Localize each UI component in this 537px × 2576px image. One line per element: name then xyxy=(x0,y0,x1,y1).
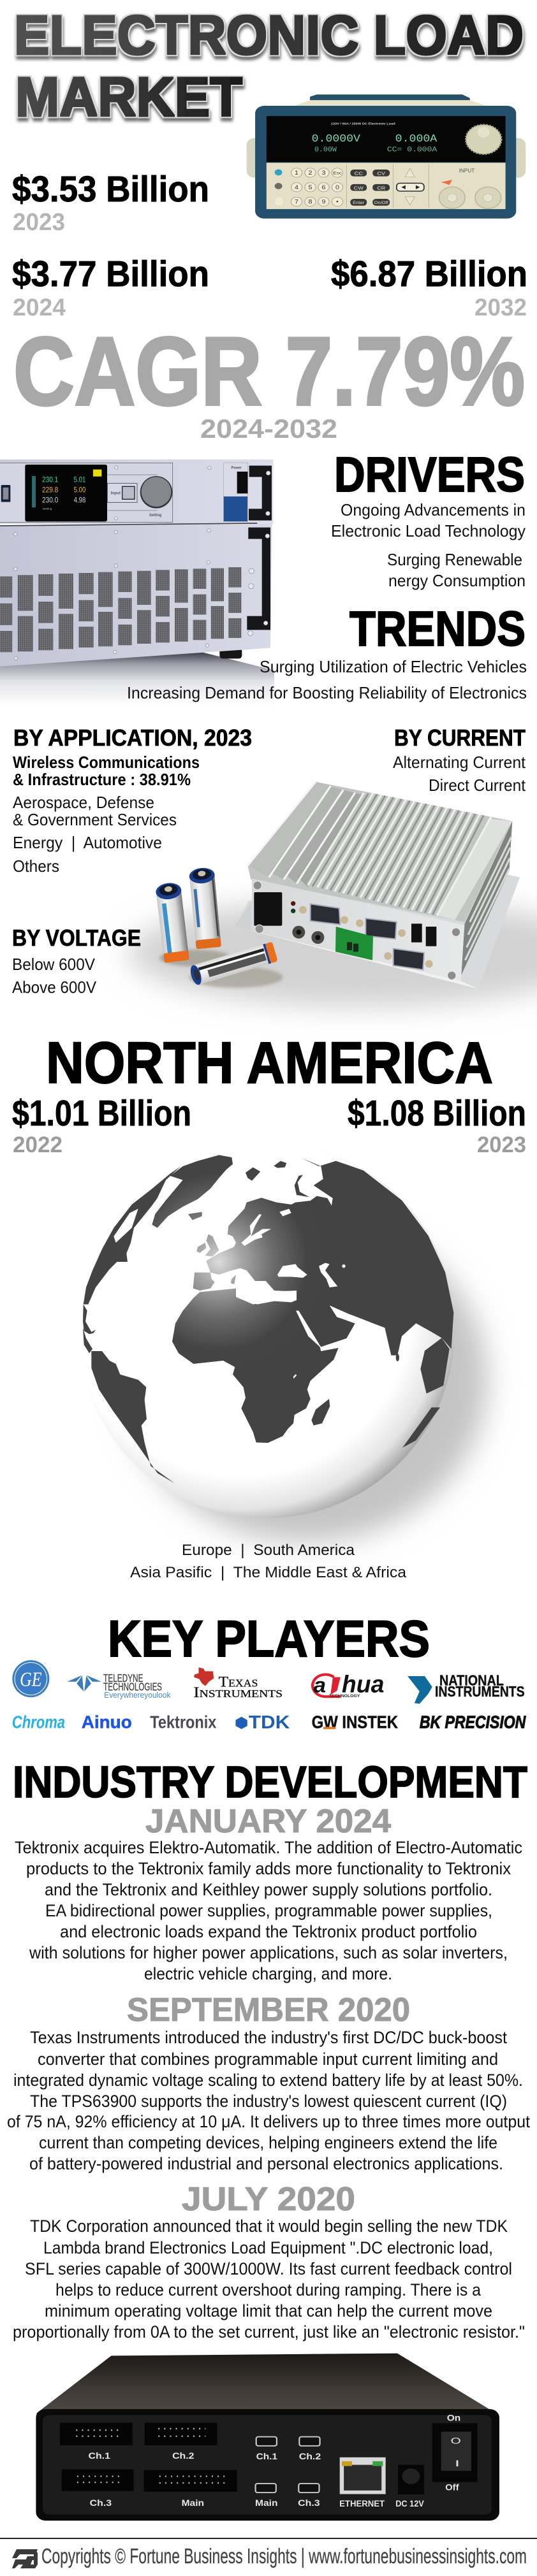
stat: 2023 market size xyxy=(12,169,209,236)
panel: by application: & Infrastructure : 38.91% xyxy=(13,770,191,789)
panel: trends xyxy=(127,602,527,702)
logo: Teledyne: Everywhereyoulook xyxy=(104,1691,171,1700)
image: black controller box rear panel: O xyxy=(451,2436,461,2446)
logo: Teledyne: TELEDYNE xyxy=(103,1672,143,1684)
image: rack power equipment: 230.0 xyxy=(42,495,59,504)
image: black controller box rear panel: Ch.1 xyxy=(256,2452,277,2462)
value: $3.53 Billion xyxy=(12,169,209,210)
description xyxy=(13,2217,525,2341)
description xyxy=(7,2028,530,2173)
image: rack power equipment: Setting xyxy=(149,514,162,517)
image: rack power equipment: Power xyxy=(232,467,242,470)
other regions xyxy=(130,1542,407,1581)
globe xyxy=(78,1142,455,1518)
floor shadow behind products xyxy=(128,899,537,1007)
image: DC electronic load device: CW xyxy=(354,185,364,191)
image: DC electronic load device: • xyxy=(336,199,339,205)
description: converter that combines programmable input current limiting and xyxy=(38,2050,498,2069)
image: DC electronic load device: 0.00W xyxy=(314,145,337,154)
battery 2 xyxy=(189,867,221,949)
panel: drivers xyxy=(331,447,526,590)
logo: Dahua: a xyxy=(313,1674,326,1697)
description: Lambda brand Electronics Load Equipment ".DC electronic load, xyxy=(43,2238,493,2257)
image: batteries xyxy=(155,867,283,988)
logo: National Instruments: NATIONAL xyxy=(439,1672,504,1689)
image: finned aluminium electronic load module xyxy=(235,782,520,989)
year: 2023 xyxy=(13,209,65,236)
segment 2: Direct Current xyxy=(429,776,526,795)
image: DC electronic load device: INPUT xyxy=(459,168,475,173)
logo: Dahua xyxy=(313,1671,385,1698)
trend 2: Increasing Demand for Boosting Reliability of Electronics xyxy=(127,683,527,702)
image: black controller box rear panel: Ch.3 xyxy=(90,2499,112,2508)
image: black controller box rear panel: I xyxy=(455,2459,459,2469)
description: EA bidirectional power supplies, programmable power supplies, xyxy=(45,1901,492,1920)
footer rule xyxy=(0,2538,537,2539)
image: rack power equipment: 5.00 xyxy=(74,485,86,494)
image: DC electronic load device: CR xyxy=(377,185,385,191)
battery 1 xyxy=(155,881,189,963)
description: products to the Tektronix family adds more functionality to Tektronix xyxy=(26,1859,511,1878)
image: black controller box rear panel: Main xyxy=(182,2499,204,2508)
panel: North America xyxy=(12,1031,526,1157)
description: helps to reduce current overshoot during ramping. There is a xyxy=(55,2280,482,2299)
driver 2: Surging Renewable xyxy=(387,550,522,569)
description xyxy=(15,1838,522,1983)
battery 3 xyxy=(189,942,278,986)
title xyxy=(14,4,524,128)
description: The TPS63900 supports the industry's lowest quiescent current (IQ) xyxy=(30,2092,507,2111)
panel: by application: Others xyxy=(13,857,59,876)
development: January 2024 xyxy=(15,1803,522,1983)
image: black controller box rear panel: Ch.2 xyxy=(299,2452,321,2462)
description: of battery-powered industrial and personal electronics applications. xyxy=(29,2154,503,2173)
logo: GW Instek: GW INSTEK xyxy=(312,1712,398,1732)
image: DC electronic load device: 6 xyxy=(321,185,326,191)
image: black controller box rear panel: Ch.1 xyxy=(89,2452,110,2461)
globe shadow xyxy=(124,1217,488,1542)
image: DC electronic load device: 0 xyxy=(335,185,339,191)
image: DC electronic load device: Enter xyxy=(353,201,365,205)
regions line 1: Europe | South America xyxy=(182,1542,355,1559)
panel: by current xyxy=(393,725,526,795)
description: minimum operating voltage limit that can help the current move xyxy=(45,2301,492,2320)
heading: BY VOLTAGE xyxy=(12,925,141,951)
image: DC electronic load device: 0.000A xyxy=(395,132,438,145)
image: DC electronic load device: 8 xyxy=(309,199,313,205)
image: DC electronic load device: 9 xyxy=(321,199,326,205)
logo: GE: GE xyxy=(20,1668,42,1691)
image: DC electronic load device: 2 xyxy=(309,170,313,177)
value: $6.87 Billion xyxy=(331,254,527,294)
image: black controller box rear panel: DC 12V xyxy=(395,2500,424,2509)
key players heading: KEY PLAYERS xyxy=(108,1610,430,1668)
description: SFL series capable of 300W/1000W. Its fast current feedback control xyxy=(25,2259,512,2278)
image: rack power equipment: 229.8 xyxy=(42,485,59,494)
year: 2032 xyxy=(474,294,527,321)
image: DC electronic load device: Esc xyxy=(333,170,342,175)
title line 2: MARKET xyxy=(15,66,242,128)
2023 label: 2023 xyxy=(477,1132,526,1157)
image: black controller box rear panel: Off xyxy=(445,2483,459,2493)
description: and electronic loads expand the Tektronix product portfolio xyxy=(60,1922,477,1941)
image: black controller box rear panel: ETHERNET xyxy=(339,2500,385,2509)
panel: drivers: nergy Consumption xyxy=(388,571,526,590)
image: DC electronic load device: 1 xyxy=(295,170,298,177)
date: SEPTEMBER 2020 xyxy=(127,1992,410,2029)
panel: by voltage xyxy=(12,925,141,997)
image: DC electronic load device xyxy=(247,94,526,219)
description: TDK Corporation announced that it would begin selling the new TDK xyxy=(30,2217,508,2236)
key player logos xyxy=(12,1660,526,1733)
trend 1: Surging Utilization of Electric Vehicles xyxy=(260,657,527,676)
CAGR period: 2024-2032 xyxy=(200,414,337,444)
image: DC electronic load device: On/Off xyxy=(374,201,388,205)
logo: Dahua: hua xyxy=(342,1671,385,1698)
segments: Aerospace, Defense xyxy=(13,793,154,812)
logo: GE xyxy=(12,1660,49,1697)
image: rack power equipment: 5.01 xyxy=(74,475,86,484)
image: black controller box rear panel: On xyxy=(447,2413,460,2423)
description: Texas Instruments introduced the industry's first DC/DC buck-boost xyxy=(30,2028,507,2047)
date: JULY 2020 xyxy=(182,2181,355,2218)
logo: Chroma: Chroma xyxy=(12,1712,65,1732)
logo: Texas Instruments: Texas xyxy=(219,1674,258,1690)
image: DC electronic load device: CC= 0.000A xyxy=(387,145,438,154)
heading: NORTH AMERICA xyxy=(46,1031,493,1096)
title line 1: ELECTRONIC LOAD xyxy=(14,4,524,66)
logo: Teledyne: TECHNOLOGIES xyxy=(103,1681,162,1693)
logo: Tektronix: Tektronix xyxy=(150,1712,217,1732)
stat: 2024 market size xyxy=(12,254,209,321)
logo: Ainuo: Ainuo xyxy=(82,1712,132,1732)
image: DC electronic load device: 3 xyxy=(321,170,326,177)
description: with solutions for higher power applications, such as solar inverters, xyxy=(29,1943,508,1962)
segment 1: Alternating Current xyxy=(393,753,526,772)
image: rack power equipment: Input xyxy=(111,491,121,496)
development: July 2020 xyxy=(13,2181,525,2341)
description: electric vehicle charging, and more. xyxy=(144,1964,392,1983)
panel: drivers: Electronic Load Technology xyxy=(331,521,526,540)
logo: Teledyne xyxy=(67,1672,171,1700)
image: DC electronic load device: 120V / 60A / 250W DC Electronic Load xyxy=(331,122,395,126)
development: September 2020 xyxy=(7,1992,530,2173)
image: rack power equipment: 230.1 xyxy=(42,475,59,484)
image: DC electronic load device: CV xyxy=(377,170,385,176)
stat: 2032 market size xyxy=(331,254,527,321)
panel: by application: Energy | Automotive xyxy=(13,833,162,852)
logo: TDK: TDK xyxy=(249,1712,290,1733)
leading segment: Wireless Communications xyxy=(13,753,200,772)
value: $3.77 Billion xyxy=(12,254,209,294)
image: DC electronic load device: 7 xyxy=(295,199,298,205)
image: DC electronic load device: 5 xyxy=(309,185,313,191)
image: DC electronic load device: 0.0000V xyxy=(312,132,361,145)
image: black controller box rear panel: Ch.2 xyxy=(172,2452,194,2461)
2022 label: 2022 xyxy=(13,1132,63,1157)
year: 2024 xyxy=(13,294,66,321)
segment 2: Above 600V xyxy=(12,978,97,997)
logo: Dahua: TECHNOLOGY xyxy=(329,1694,360,1698)
image: rack power equipment: Setting xyxy=(43,507,52,510)
panel: by application xyxy=(13,725,252,876)
heading: BY APPLICATION, 2023 xyxy=(13,725,252,751)
icon: Fortune Business Insights logo xyxy=(12,2549,38,2568)
description: and the Tektronix and Keithley power supply solutions portfolio. xyxy=(45,1880,492,1899)
logo: National Instruments xyxy=(408,1672,525,1704)
2022 value: $1.01 Billion xyxy=(12,1093,191,1134)
image: DC electronic load device: 4 xyxy=(295,185,299,191)
driver 1: Ongoing Advancements in xyxy=(341,500,526,519)
image: black controller box rear panel: Main xyxy=(255,2499,278,2508)
footer xyxy=(12,2544,527,2568)
logo: Texas Instruments xyxy=(193,1667,283,1701)
description: current than competing devices, helping engineers extend the life xyxy=(39,2133,497,2152)
image: black controller box rear panel: Ch.3 xyxy=(298,2499,320,2508)
segment 1: Below 600V xyxy=(12,955,96,974)
logo: Texas Instruments: Instruments xyxy=(193,1685,283,1701)
image: DC electronic load device: CC xyxy=(355,170,363,176)
date: JANUARY 2024 xyxy=(145,1803,391,1840)
image: rack power equipment: 4.98 xyxy=(74,495,86,504)
regions line 2: Asia Pasific | The Middle East & Africa xyxy=(130,1564,407,1581)
panel: by application: & Government Services xyxy=(13,810,177,829)
image: rack power equipment xyxy=(0,459,274,706)
image: black controller box rear panel xyxy=(36,2354,499,2521)
